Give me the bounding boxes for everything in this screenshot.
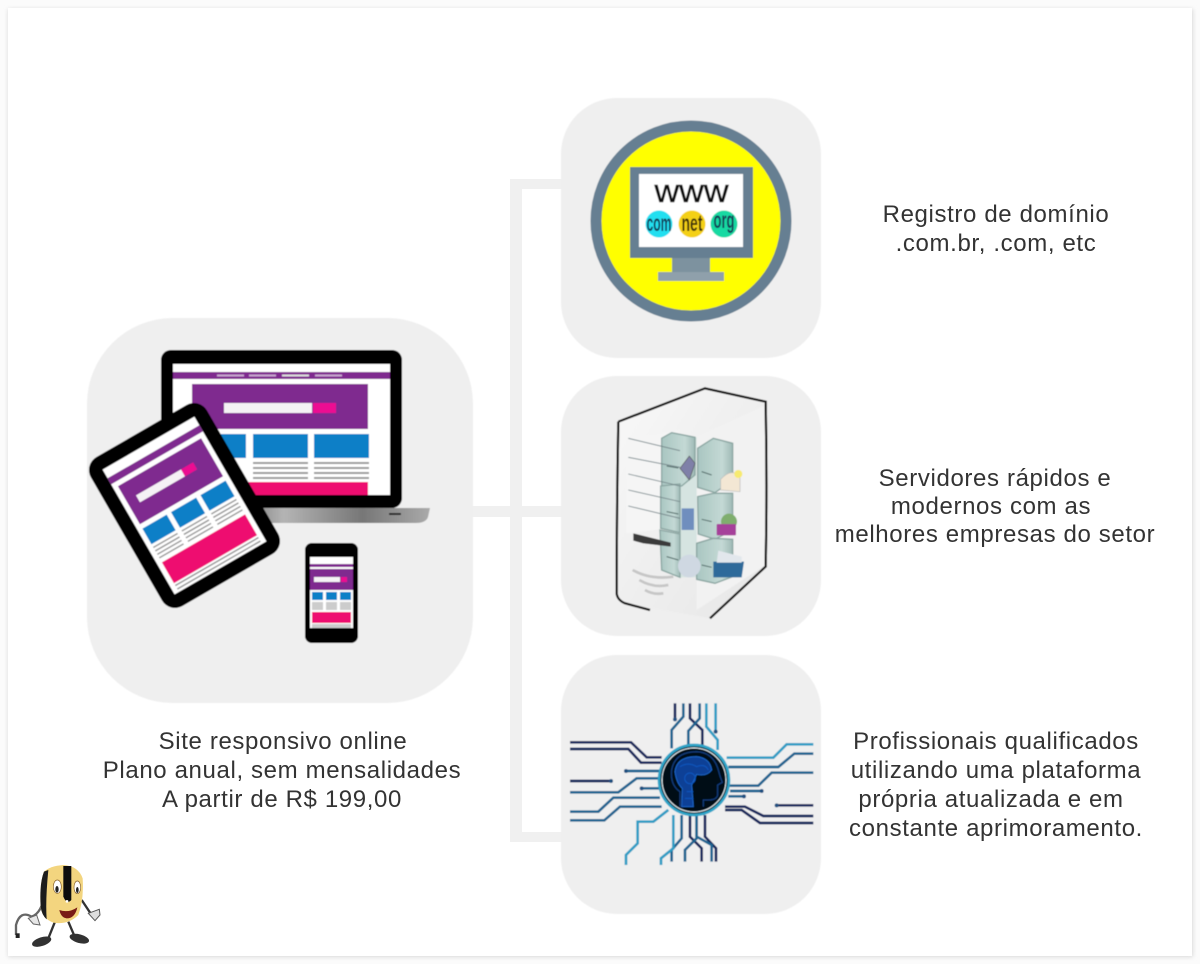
- text: site plan: Site responsivo online: [159, 728, 407, 755]
- icon: www monitor: com: [646, 210, 672, 236]
- text: servers: melhores empresas do setor: [835, 521, 1155, 548]
- text: professionals: própria atualizada e em: [858, 786, 1124, 813]
- panel: servers: [561, 376, 821, 636]
- text: site plan: [103, 728, 461, 813]
- panel: responsive devices: [83, 318, 473, 703]
- text: domain: .com.br, .com, etc: [896, 230, 1096, 257]
- icon: www monitor: org: [714, 207, 734, 233]
- connector lines: [465, 179, 570, 842]
- text: professionals: Profissionais qualificados: [853, 728, 1139, 755]
- icon: mouse mascot: [16, 865, 100, 949]
- text: site plan: Plano anual, sem mensalidades: [103, 757, 461, 784]
- text: site plan: A partir de R$ 199,00: [162, 786, 402, 813]
- text: domain: [883, 201, 1109, 257]
- text: servers: Servidores rápidos e: [879, 465, 1111, 492]
- icon: www monitor: net: [682, 210, 703, 236]
- icon: www monitor: [596, 126, 786, 316]
- text: servers: modernos com as: [891, 493, 1091, 520]
- icon: www monitor: www: [653, 173, 729, 209]
- text: domain: Registro de domínio: [883, 201, 1109, 228]
- text: professionals: [849, 728, 1143, 842]
- icon: tablet: [83, 398, 286, 613]
- icon: phone: [305, 543, 358, 643]
- icon: laptop: [161, 350, 430, 523]
- panel: professionals: [561, 655, 821, 914]
- icon: circuit brain: [570, 703, 813, 865]
- text: servers: [835, 465, 1155, 548]
- text: professionals: constante aprimoramento.: [849, 815, 1143, 842]
- panel: domain: [561, 98, 821, 358]
- icon: server tower: [617, 388, 766, 618]
- text: professionals: utilizando uma plataforma: [851, 757, 1141, 784]
